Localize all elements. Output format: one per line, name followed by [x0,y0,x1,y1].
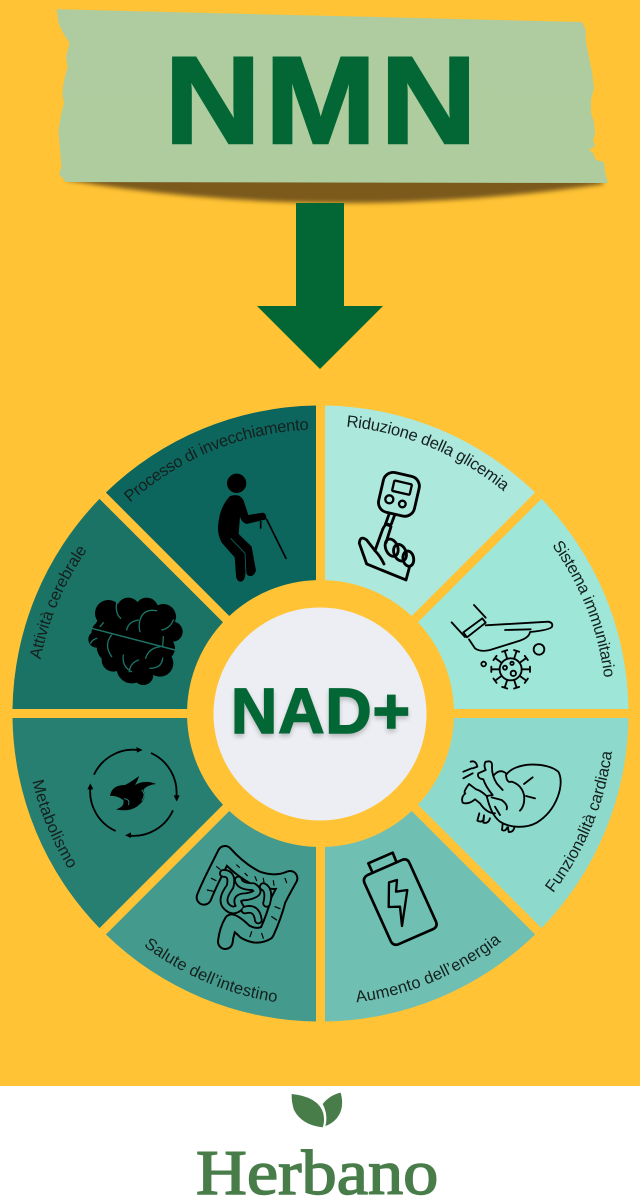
label NAD+: NAD+ [231,675,410,747]
panel: Metabolismo [12,718,223,928]
panel: Funzionalità cardiaca: Funzionalità cardiaca [544,752,612,892]
tape banner with NMN title [57,9,608,203]
icon: brain [88,598,183,685]
wheel of benefits [12,406,628,1022]
panel: Riduzione della glicemia: Riduzione della glicemia [348,415,508,492]
icon: intestine [204,853,290,942]
panel: Aumento dell'energia [325,811,535,1022]
icon: leaves [292,1093,342,1127]
panel: Funzionalità cardiaca [418,718,628,928]
icon: battery [364,853,437,945]
panel: Attività cerebrale: Attività cerebrale [30,547,86,660]
panel: Processo di invecchiamento [106,406,316,616]
panel: Sistema immunitario [418,499,628,709]
arrow down [257,203,383,369]
panel: Salute dell'intestino [106,811,316,1022]
icon: heart [462,761,561,832]
icon: elderly person with cane [218,474,286,582]
panel: Riduzione della glicemia [325,406,535,616]
panel: Processo di invecchiamento: Processo di invecchiamento [124,420,308,502]
icon: glucose meter in hand [359,470,421,580]
panel: Salute dell'intestino: Salute dell’intestino [145,938,277,1002]
centre circle with NAD+: NAD+ [231,678,410,750]
panel: Sistema immunitario: Sistema immunitario [554,541,615,677]
panel: Metabolismo: Metabolismo [32,780,75,868]
title NMN: NMN [164,31,481,170]
panel: Aumento dell'energia: Aumento dell’energia [356,936,502,1002]
icon: foot and virus [452,605,552,689]
centre circle with NAD+ [214,608,426,820]
torn tape shape [57,9,608,183]
icon: metabolism cycle with flame [87,747,180,838]
footer logo band [0,1086,640,1200]
panel: Attività cerebrale [12,499,223,709]
